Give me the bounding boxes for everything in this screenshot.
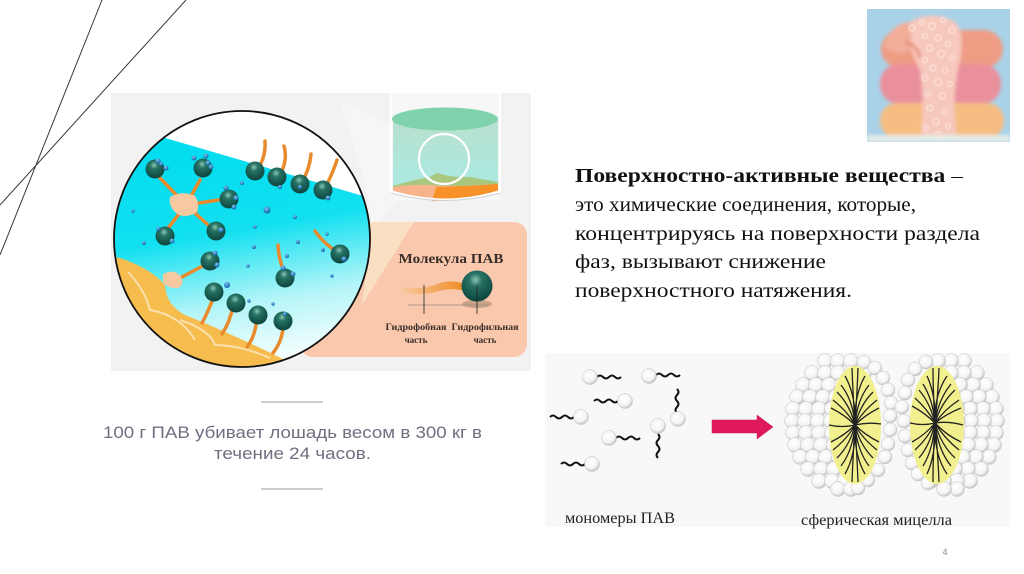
text block: definition (575, 165, 980, 302)
surfactant molecules (146, 158, 350, 330)
water (114, 138, 370, 359)
arrow (712, 415, 773, 439)
highlight wedge between lens and legend (362, 222, 414, 305)
callout: lethal dose note: 100 г ПАВ убивает лошадь весом в 300 кг в (103, 423, 482, 442)
molecule legend: часть (474, 335, 497, 345)
icon: right micelle half (895, 354, 1004, 496)
icon: surfactant molecule (401, 270, 492, 314)
icon: beaker (390, 93, 500, 201)
tails (160, 141, 338, 353)
decorative diagonal lines (0, 0, 186, 255)
text block: definition: поверхностного натяжения. (575, 280, 852, 302)
molecule legend (386, 252, 519, 345)
callout: lethal dose note: течение 24 часов. (214, 444, 371, 463)
magnifying lens illustration (100, 111, 375, 375)
blue ions (131, 154, 346, 316)
heading: Молекула ПАВ: Молекула ПАВ (398, 252, 504, 267)
faint beam from beaker to lens (340, 100, 418, 222)
monomers (550, 368, 686, 472)
oil droplets (170, 193, 198, 216)
text block: definition: Поверхностно-активные вещества – (575, 165, 964, 187)
panel: micelle formation diagram (545, 353, 1010, 529)
label: spherical micelle: сферическая мицелла (801, 512, 952, 529)
text block: definition: фаз, вызывают снижение (575, 251, 826, 273)
label: hydrophobic part: Гидрофобная (386, 322, 447, 332)
panel: surfactant molecule diagram (100, 93, 531, 375)
molecule legend: часть (405, 335, 428, 345)
oily surface (116, 257, 284, 366)
icon: left micelle half (784, 354, 898, 496)
page number: 4 (942, 547, 948, 557)
image: stacked soap bars with foam (867, 9, 1010, 142)
label: monomers: мономеры ПАВ (565, 510, 675, 527)
label: hydrophilic part: Гидрофильная (452, 322, 519, 332)
text block: definition: концентрируясь на поверхности раздела (575, 223, 980, 245)
callout: lethal dose note (103, 402, 482, 489)
text block: definition: это химические соединения, которые, (575, 194, 916, 216)
panel: molecule legend background (300, 222, 527, 357)
